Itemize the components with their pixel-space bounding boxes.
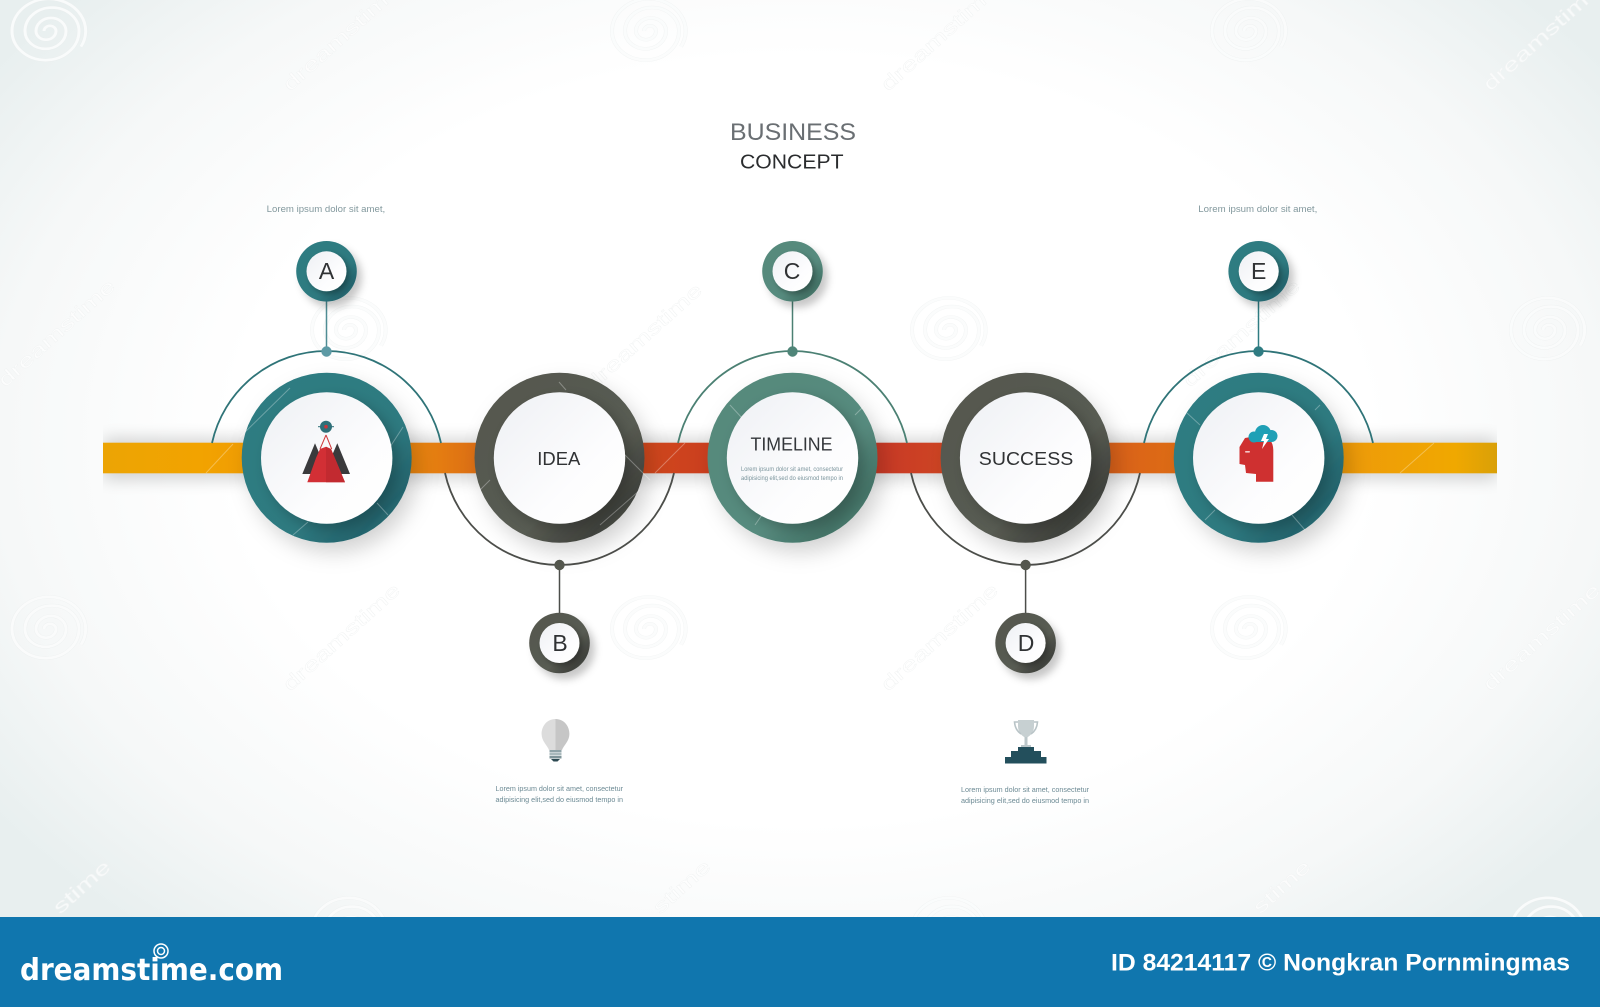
- heading: business concept: CONCEPT: [740, 150, 844, 173]
- watermark text: dreamstime: [279, 0, 405, 96]
- connector D: [1020, 560, 1031, 614]
- ring E: [1174, 373, 1344, 543]
- watermark text: dreamstime: [1479, 580, 1600, 696]
- ring C: timeline: adipisicing elit,sed do eiusmod tempo in: [741, 475, 843, 482]
- connector C: [787, 300, 798, 357]
- logo text: dreamstime.com: [20, 953, 283, 988]
- small badge C: [762, 241, 823, 302]
- small badge B: [529, 613, 590, 673]
- watermark text: stime: [649, 856, 715, 919]
- icon: mountains: [302, 421, 350, 482]
- icon: trophy on podium: [1005, 720, 1046, 764]
- text block under B: [496, 784, 624, 804]
- text block under D: [961, 785, 1090, 805]
- heading: business concept: [730, 119, 856, 173]
- connector B: [554, 560, 565, 614]
- ring D: success: [941, 373, 1111, 543]
- watermark text: dreamstime: [279, 580, 405, 696]
- watermark text: dreamstime: [581, 280, 707, 396]
- timeline band: [103, 438, 1497, 480]
- arc E: [1144, 351, 1373, 443]
- watermark hairlines over rings and band: [206, 382, 1434, 535]
- watermark text: dreamstime: [1179, 276, 1305, 392]
- heading: business concept: BUSINESS: [730, 119, 856, 146]
- text block under D: Lorem ipsum dolor sit amet, consectetur: [961, 785, 1090, 794]
- watermark text: dreamstime: [877, 580, 1003, 696]
- text block under B: adipisicing elit,sed do eiusmod tempo in: [496, 795, 623, 804]
- small badge D: [995, 613, 1056, 673]
- logo spiral: [154, 944, 168, 958]
- icon: light bulb: [542, 719, 569, 762]
- small badge E: [1228, 241, 1289, 302]
- arc C: [678, 351, 907, 443]
- small badge A: [296, 241, 357, 302]
- ring C: timeline: [708, 373, 878, 543]
- caption above A: Lorem ipsum dolor sit amet,: [267, 204, 385, 215]
- connector E: [1253, 300, 1264, 357]
- arc D: [911, 473, 1140, 565]
- small badge C: C: [784, 258, 800, 284]
- watermark text: dreamstime: [1479, 0, 1600, 96]
- caption above E: Lorem ipsum dolor sit amet,: [1198, 204, 1317, 215]
- text block under B: Lorem ipsum dolor sit amet, consectetur: [496, 784, 624, 793]
- ring D: success: SUCCESS: [979, 449, 1073, 469]
- ring B: idea: [474, 373, 644, 543]
- small badge B: B: [552, 630, 568, 656]
- watermark text: stime: [49, 856, 115, 919]
- watermark text: dreamstime: [877, 0, 1003, 96]
- connector A: [321, 300, 332, 357]
- image credit: ID 84214117 © Nongkran Pornmingmas: [1111, 950, 1570, 976]
- small badge E: E: [1251, 258, 1266, 284]
- ring C: timeline: TIMELINE: [750, 434, 832, 454]
- small badge D: D: [1018, 630, 1034, 656]
- watermark text: stime: [1249, 856, 1315, 919]
- icon: head with storm cloud: [1240, 425, 1278, 482]
- ring C: timeline: Lorem ipsum dolor sit amet, consectetur: [741, 466, 843, 473]
- arc A: [212, 351, 441, 443]
- footer bar: [0, 917, 1600, 1007]
- ring A: [242, 373, 412, 543]
- small badge A: A: [319, 258, 335, 284]
- ring B: idea: IDEA: [537, 449, 580, 469]
- arc B: [445, 473, 674, 565]
- text block under D: adipisicing elit,sed do eiusmod tempo in: [961, 796, 1089, 805]
